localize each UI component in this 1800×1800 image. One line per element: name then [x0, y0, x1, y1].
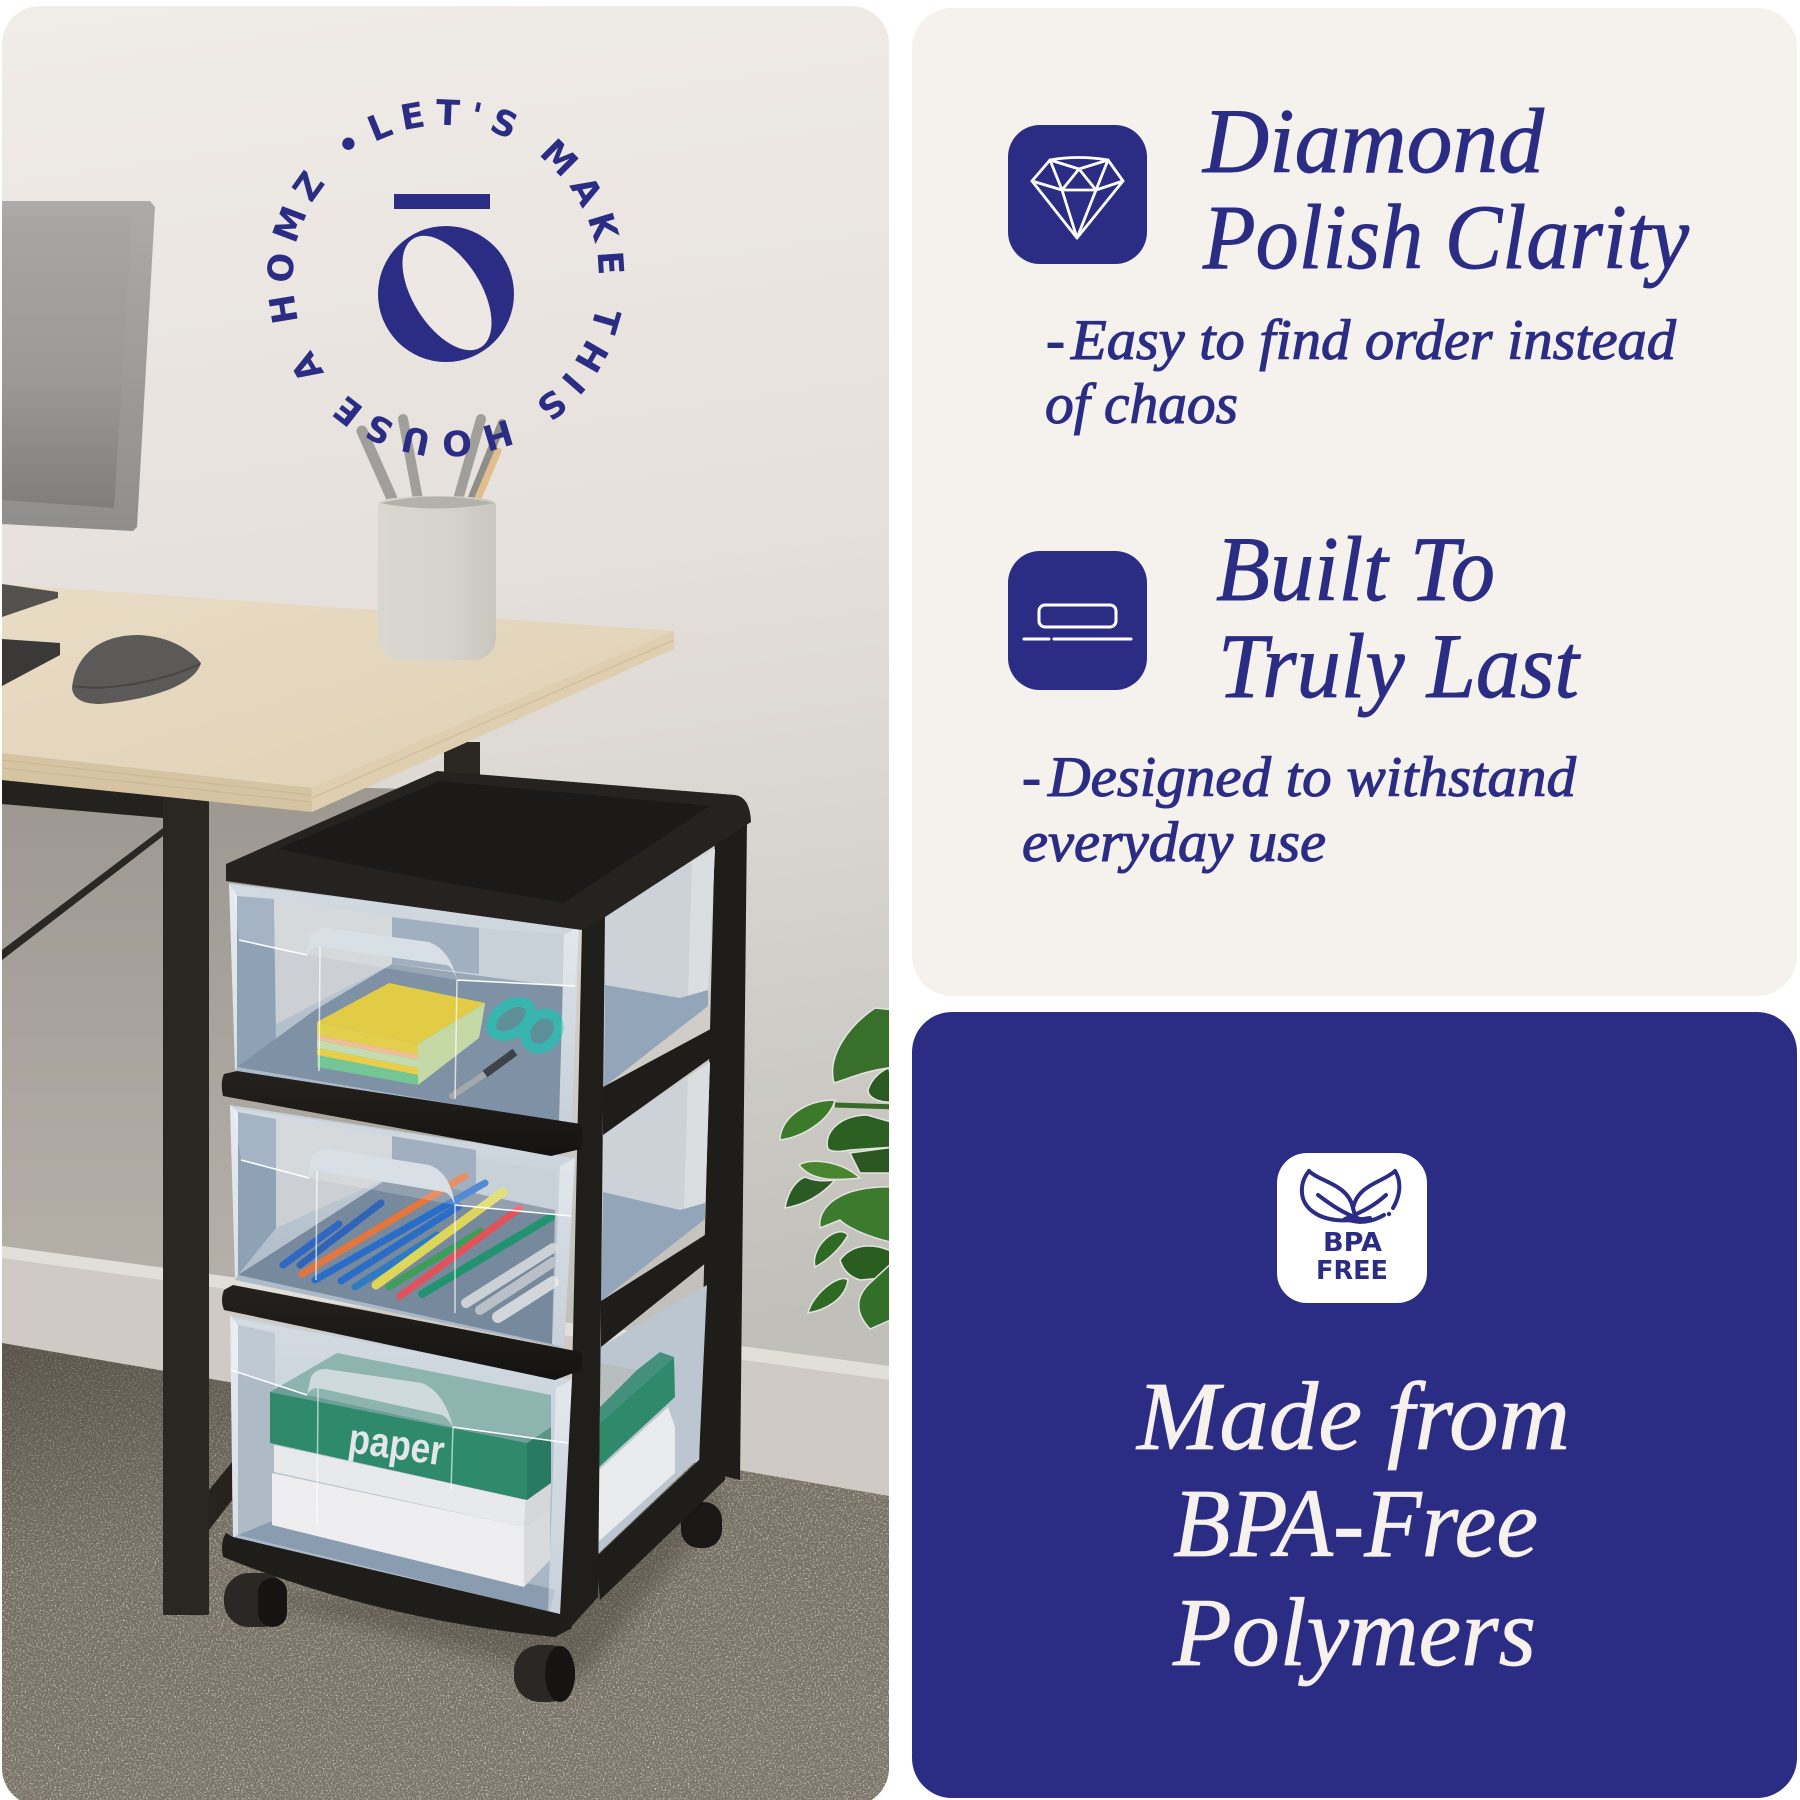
side window middle — [601, 1062, 710, 1301]
paper brand label: paper — [346, 1414, 447, 1474]
desk legs and frame — [2, 742, 480, 1615]
drawer 2 — [230, 1105, 575, 1348]
logo: ring — [378, 221, 514, 365]
heading: diamond polish clarity: Diamond — [1201, 90, 1545, 192]
panel: benefits — [912, 8, 1797, 996]
side window upper — [604, 849, 715, 1087]
skirting board — [2, 1246, 889, 1496]
heading: built to truly last: Built To — [1216, 518, 1495, 620]
keyboard — [2, 639, 60, 686]
heading: built to truly last: Truly Last — [1218, 615, 1581, 717]
pens and markers — [283, 1176, 553, 1317]
front right caster — [514, 1645, 575, 1702]
paper box and reams — [270, 1353, 551, 1587]
text: designed to withstand — [1022, 746, 1577, 874]
storage cart — [222, 771, 751, 1702]
cart top tray — [226, 771, 751, 930]
side rails — [603, 1029, 710, 1135]
icon: diamond — [1008, 125, 1147, 264]
text: designed to withstand: - — [1022, 746, 1041, 809]
pen holder cup — [378, 496, 496, 660]
drawer 1 front overlay and handle — [229, 883, 579, 1126]
drawer 1 — [229, 883, 579, 1126]
heading: diamond polish clarity — [1201, 90, 1689, 288]
text: easy to find order: - — [1046, 309, 1065, 372]
scissors — [452, 995, 566, 1096]
drawer 2 front overlay and handle — [230, 1105, 575, 1348]
drawer rail 2 — [222, 1071, 582, 1156]
text: designed to withstand: Designed to withstand — [1047, 746, 1577, 809]
logo: overbar — [394, 194, 490, 209]
plant leaves — [780, 1008, 895, 1329]
computer mouse — [72, 635, 201, 704]
circular slogan: LET'S MAKE THIS HOUSE A HOMZ • — [267, 99, 624, 457]
drawer rail 3 — [222, 1285, 582, 1380]
text: designed to withstand: everyday use — [1022, 811, 1326, 874]
icon: BPA free badge — [1277, 1153, 1427, 1303]
text: easy to find order — [1045, 309, 1677, 436]
panel: BPA free — [912, 1012, 1797, 1798]
sticky notes — [317, 983, 485, 1085]
text: easy to find order: of chaos — [1045, 373, 1238, 436]
front left caster — [224, 1573, 287, 1627]
laptop base — [2, 584, 58, 617]
side window lower — [597, 1285, 707, 1555]
text: easy to find order: Easy to find order instead — [1070, 309, 1677, 372]
pencils — [362, 419, 502, 510]
heading: made from BPA-free polymers: BPA-Free — [1173, 1470, 1538, 1578]
computer monitor — [2, 201, 155, 531]
logo seal — [267, 99, 624, 457]
carpet floor — [2, 1343, 889, 1800]
heading: diamond polish clarity: Polish Clarity — [1202, 186, 1689, 288]
icon: durable bar — [1008, 551, 1147, 690]
heading: made from BPA-free polymers — [1135, 1363, 1570, 1687]
wall background — [2, 6, 889, 1800]
front corner post — [560, 914, 605, 1628]
icon: BPA free badge: FREE — [1316, 1256, 1388, 1286]
icon: BPA free badge: BPA — [1323, 1228, 1382, 1258]
heading: made from BPA-free polymers: Polymers — [1172, 1579, 1536, 1687]
drawer 3 — [230, 1315, 572, 1615]
heading: built to truly last — [1216, 518, 1581, 717]
desk top — [2, 584, 674, 812]
panel: product photo — [2, 6, 889, 1800]
rear side post — [699, 820, 747, 1480]
cart base — [222, 1533, 572, 1637]
drawer 3 front overlay and handle — [230, 1315, 572, 1615]
shaded wall under desk — [2, 780, 470, 1310]
rear caster — [681, 1502, 722, 1548]
heading: made from BPA-free polymers: Made from — [1135, 1363, 1570, 1471]
